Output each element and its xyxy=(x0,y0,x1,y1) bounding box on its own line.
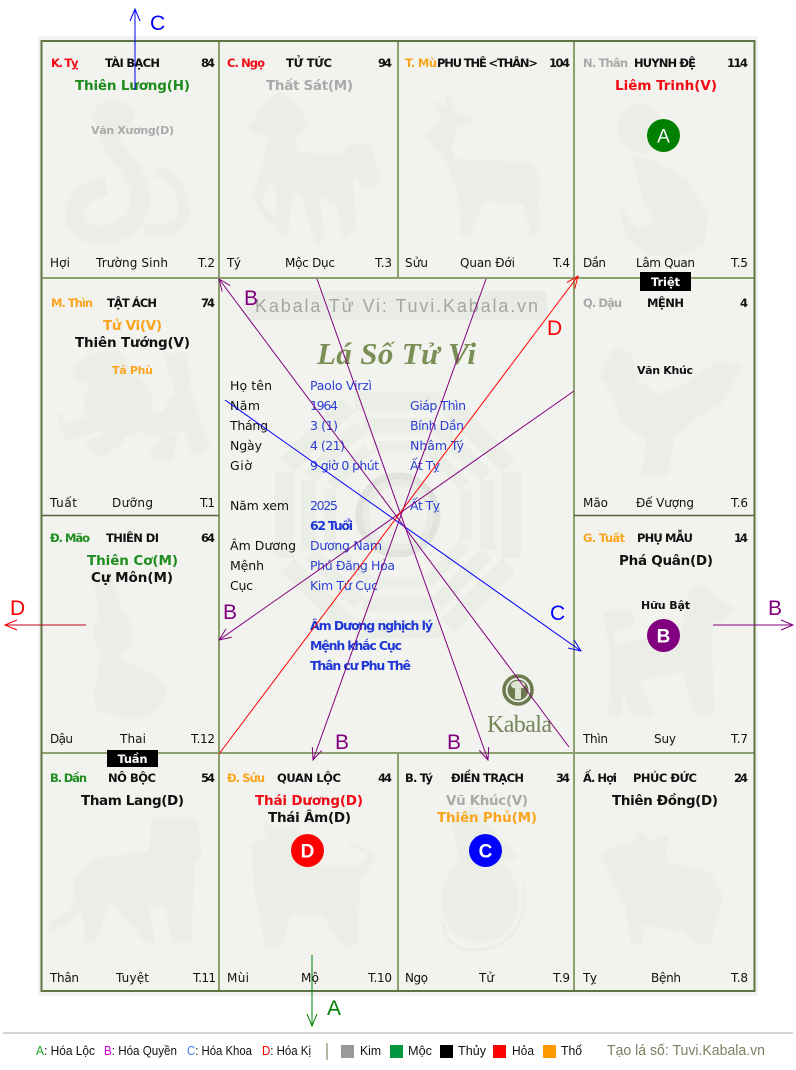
badge D: D xyxy=(301,842,314,862)
main star: Thiên Tướng(V) xyxy=(75,335,190,351)
footer row: Suy xyxy=(654,732,676,746)
footer row xyxy=(583,256,748,270)
icon: dragon watermark xyxy=(58,352,208,460)
icon: horse watermark xyxy=(250,93,380,243)
arrow: D left, red xyxy=(5,624,86,626)
header row: 44 xyxy=(378,771,392,785)
legend: Thủy: Thủy xyxy=(458,1043,486,1058)
banner: site name xyxy=(247,291,547,320)
header row: N. Thân xyxy=(583,56,628,70)
logo: Kabala: Kabala xyxy=(487,712,552,738)
badge A xyxy=(647,119,680,152)
header row: G. Tuất xyxy=(583,531,626,545)
panel: centre information xyxy=(229,291,552,738)
main star: Tử Vi(V) xyxy=(103,318,162,334)
footer row: T.10 xyxy=(367,971,392,985)
text block: birth details: Giờ xyxy=(230,458,252,473)
legend: Thổ xyxy=(543,1043,582,1058)
minor star: Văn Khúc xyxy=(637,364,693,377)
footer row: Tý xyxy=(226,256,241,270)
footer row xyxy=(50,732,215,746)
legend: D Hóa Kị: D: Hóa Kị xyxy=(262,1043,311,1058)
footer row: T.1 xyxy=(199,496,215,510)
footer row xyxy=(49,971,216,985)
panel: Phúc Đức (Hợi) xyxy=(575,754,754,991)
text block: birth details: 9 giờ 0 phút xyxy=(310,458,379,473)
footer row: Tỵ xyxy=(582,971,597,985)
text block: birth details: Họ tên xyxy=(230,378,272,393)
header row: 104 xyxy=(549,56,570,70)
minor star: Hữu Bật xyxy=(641,599,690,612)
header row xyxy=(51,295,215,310)
main star: Cự Môn(M) xyxy=(91,570,173,586)
title: Lá Số Tử Vi: Lá Số Tử Vi xyxy=(316,336,476,371)
header row: K. Tỵ xyxy=(51,56,79,70)
label: D left: D xyxy=(10,597,25,620)
footer row: Mộ xyxy=(301,971,319,985)
arrow: B left, purple xyxy=(219,391,574,640)
footer row: Lâm Quan xyxy=(636,256,695,270)
header row xyxy=(583,55,748,70)
icon: goat watermark xyxy=(428,95,537,233)
badge C xyxy=(469,834,502,867)
text block: birth details: Năm xem xyxy=(230,498,289,513)
icon: monkey watermark xyxy=(619,105,707,255)
footer row: T.12 xyxy=(190,732,215,746)
header row: Q. Dậu xyxy=(583,296,622,310)
text block: birth details: Mệnh xyxy=(230,558,264,573)
text block: birth details: 4 (21) xyxy=(310,438,345,453)
header row xyxy=(50,770,215,785)
main star: Thiên Cơ(M) xyxy=(87,553,178,569)
label: D upper-right: D xyxy=(547,317,562,340)
label: B bottom-left: B xyxy=(335,731,349,754)
panel: Điền Trạch (Tý) xyxy=(398,754,574,991)
arrow: D diagonal, red xyxy=(219,276,578,754)
header row xyxy=(405,768,570,785)
legend: Mộc xyxy=(390,1043,432,1058)
footer row: T.3 xyxy=(374,256,392,270)
footer row: Mùi xyxy=(227,971,249,985)
legend bar xyxy=(3,1033,793,1060)
minor star: Tả Phù xyxy=(112,364,153,377)
label: B bottom-right: B xyxy=(447,731,461,754)
icon: tiger watermark xyxy=(50,820,200,942)
header row: TỬ TỨC xyxy=(286,54,332,70)
badge D xyxy=(291,834,324,867)
header row xyxy=(227,770,392,785)
header row: PHÚC ĐỨC xyxy=(633,770,697,785)
header row: MỆNH xyxy=(647,295,684,310)
badge B: B xyxy=(657,626,670,648)
header row: Đ. Mão xyxy=(50,531,90,545)
text block: remarks: Mệnh khắc Cục xyxy=(310,638,402,653)
footer row: Tử xyxy=(478,971,495,985)
footer row: Sửu xyxy=(405,256,428,270)
panel: Thiên Di (Mão) xyxy=(42,516,219,753)
footer row xyxy=(583,496,748,510)
text block: birth details: 1964 xyxy=(310,398,338,413)
text block: remarks: Thân cư Phu Thê xyxy=(310,658,411,673)
footer row: T.4 xyxy=(552,256,570,270)
text block: birth details: Ất Tỵ xyxy=(410,497,441,513)
icon: rat watermark xyxy=(443,808,524,950)
arrow: A down, green xyxy=(311,955,313,1026)
footer row: T.6 xyxy=(730,496,748,510)
header row: QUAN LỘC xyxy=(277,770,341,785)
header row: M. Thìn xyxy=(51,296,93,310)
header row: TẬT ÁCH xyxy=(107,295,157,310)
footer row: Dần xyxy=(583,256,606,270)
main star: Thiên Phủ(M) xyxy=(437,810,537,826)
main star: Thiên Lương(H) xyxy=(75,78,190,94)
legend: Kim: Kim xyxy=(360,1043,381,1058)
header row: HUYNH ĐỆ xyxy=(634,55,696,70)
arrow: C diagonal, blue xyxy=(225,400,581,651)
logo: Kabala xyxy=(487,676,552,738)
text block: birth details: 3 (1) xyxy=(310,418,338,433)
panel: Phụ Mẫu (Tuất) xyxy=(575,516,754,753)
label: A bottom: A xyxy=(327,997,341,1020)
header row: B. Dần xyxy=(50,771,87,785)
footer row: T.5 xyxy=(730,256,748,270)
footer row: T.8 xyxy=(730,971,748,985)
footer row xyxy=(405,971,570,985)
main star: Thất Sát(M) xyxy=(266,77,353,94)
icon: dog watermark xyxy=(605,587,733,715)
label: C right: C xyxy=(550,602,565,625)
main star: Phá Quân(D) xyxy=(619,553,713,569)
header row xyxy=(50,530,215,545)
main star: Vũ Khúc(V) xyxy=(446,793,528,809)
footer row: Tuất xyxy=(49,496,77,510)
arrow: B upper-left, purple xyxy=(219,279,569,747)
panel: Tài Bạch (Tỵ) xyxy=(42,42,219,278)
icon: rabbit watermark xyxy=(95,573,165,717)
header row: ĐIỀN TRẠCH xyxy=(451,768,524,785)
panel: Phu Thê (Mùi) xyxy=(398,42,574,278)
badge C: C xyxy=(479,842,493,862)
header row: 94 xyxy=(378,56,392,70)
icon: rooster watermark xyxy=(600,350,740,473)
text block: birth details xyxy=(229,378,466,593)
panel: Tử Tức (Ngọ) xyxy=(220,42,397,278)
tag: Triệt: Triệt xyxy=(651,275,680,289)
header row: 14 xyxy=(734,531,748,545)
panel: Nô Bộc (Dần) xyxy=(42,754,219,991)
text block: birth details: 62 Tuổi xyxy=(310,518,353,533)
header row: PHỤ MẪU xyxy=(637,529,693,545)
main star: Liêm Trinh(V) xyxy=(615,78,717,94)
footer row: Trường Sinh xyxy=(95,256,168,270)
footer row: Ngọ xyxy=(405,971,428,985)
footer row: Hợi xyxy=(50,256,70,270)
legend: Thổ: Thổ xyxy=(561,1043,582,1058)
header row: 114 xyxy=(727,56,748,70)
tag: Triệt xyxy=(640,272,691,291)
header row: Ấ. Hợi xyxy=(583,768,617,785)
label: B right: B xyxy=(768,597,782,620)
legend: Hỏa: Hỏa xyxy=(512,1043,535,1058)
footer row: Thân xyxy=(49,971,79,985)
text block: birth details: Kim Tứ Cục xyxy=(310,578,378,593)
arrow: B down-left, purple xyxy=(313,279,486,760)
header row xyxy=(405,55,570,70)
footer row: T.7 xyxy=(730,732,748,746)
footer row: Mộc Dục xyxy=(285,256,335,270)
main star: Thiên Đồng(D) xyxy=(612,792,718,809)
header row xyxy=(583,768,748,785)
text block: birth details: Bính Dần xyxy=(410,418,464,433)
main star: Thái Âm(D) xyxy=(268,809,351,826)
footer row: T.11 xyxy=(192,971,216,985)
label: C top: C xyxy=(150,12,165,35)
credit link text: Tạo lá số: Tuvi.Kabala.vn xyxy=(607,1043,765,1059)
header row: B. Tý xyxy=(405,771,434,785)
footer row: T.9 xyxy=(552,971,570,985)
footer row xyxy=(582,971,748,985)
text block: birth details: Ngày xyxy=(230,438,263,453)
legend: Mộc: Mộc xyxy=(408,1043,432,1058)
footer row xyxy=(582,732,748,746)
tag: Tuần xyxy=(107,750,158,767)
footer row: Tuyệt xyxy=(115,971,149,985)
label: B upper-left: B xyxy=(244,287,258,310)
main star: Tham Lang(D) xyxy=(81,793,184,809)
badge B xyxy=(647,619,680,652)
icon: snake watermark xyxy=(75,100,184,235)
label: B left: B xyxy=(223,601,237,624)
text block: birth details: Dương Nam xyxy=(310,538,382,553)
header row: 74 xyxy=(201,296,215,310)
footer row: Thìn xyxy=(582,732,608,746)
icon: pig watermark xyxy=(602,830,722,943)
text block: birth details: Tháng xyxy=(229,418,268,433)
panel: Mệnh (Dậu) xyxy=(575,279,754,515)
footer row xyxy=(227,971,392,985)
text block: birth details: 2025 xyxy=(310,498,338,513)
header row: 54 xyxy=(201,771,215,785)
grid lines xyxy=(41,41,754,991)
header row: Đ. Sửu xyxy=(227,771,265,785)
header row xyxy=(583,529,748,545)
header row: T. Mù xyxy=(405,56,437,70)
header row xyxy=(583,295,748,310)
legend: A Hóa Lộc: A: Hóa Lộc xyxy=(36,1043,95,1058)
footer row: Quan Đới xyxy=(460,256,515,270)
footer row xyxy=(405,256,570,270)
arrow: C top, blue xyxy=(134,9,136,90)
header row: C. Ngọ xyxy=(227,56,265,70)
header row: NÔ BỘC xyxy=(108,770,156,785)
watermark: bagua centre xyxy=(275,392,521,638)
header row: THIÊN DI xyxy=(106,530,159,545)
header row: 24 xyxy=(734,771,748,785)
legend: Hỏa xyxy=(493,1043,535,1058)
panel: Tật Ách (Thìn) xyxy=(42,279,219,515)
text block: birth details: Ất Tỵ xyxy=(410,457,441,473)
header row: 64 xyxy=(201,531,215,545)
header row xyxy=(51,55,215,70)
footer row: Đế Vượng xyxy=(636,496,694,510)
tag: Tuần: Tuần xyxy=(118,752,148,766)
text block: birth details: Cục xyxy=(230,578,253,593)
legend: Kim xyxy=(341,1043,381,1058)
text block: birth details: Phú Đăng Hỏa xyxy=(310,558,395,573)
header row: PHU THÊ <THÂN> xyxy=(437,55,538,70)
banner: site name: Kabala Tử Vi: Tuvi.Kabala.vn xyxy=(255,296,538,316)
text block: birth details: Giáp Thìn xyxy=(410,398,466,413)
legend: C Hóa Khoa: C: Hóa Khoa xyxy=(187,1043,253,1058)
icon: ox watermark xyxy=(253,822,373,945)
text block: remarks: Âm Dương nghịch lý xyxy=(310,618,433,633)
main star: Thái Dương(D) xyxy=(255,793,363,809)
panel: Quan Lộc (Sửu) xyxy=(220,754,397,991)
panel: Huynh Đệ (Thân) xyxy=(575,42,754,278)
header row: 4 xyxy=(740,296,748,310)
arrow: B right, purple xyxy=(713,624,793,626)
header row xyxy=(227,54,392,70)
footer row: T.2 xyxy=(197,256,215,270)
footer row: Thai xyxy=(119,732,146,746)
footer row: Dậu xyxy=(50,732,73,746)
header row: 34 xyxy=(556,771,570,785)
text block: birth details: Năm xyxy=(230,398,260,413)
text block: remarks xyxy=(310,618,433,673)
footer row: Mão xyxy=(583,496,608,510)
header row: 84 xyxy=(201,56,215,70)
text block: birth details: Âm Dương xyxy=(230,538,296,553)
footer row: Bệnh xyxy=(651,971,681,985)
legend: B Hóa Quyền: B: Hóa Quyền xyxy=(104,1043,177,1058)
text block: birth details: Nhâm Tý xyxy=(410,438,465,453)
text block: birth details: Paolo Virzì xyxy=(310,378,372,393)
header row: TÀI BẠCH xyxy=(105,55,160,70)
footer row xyxy=(49,496,215,510)
footer row xyxy=(50,256,215,270)
footer row xyxy=(226,256,392,270)
legend: Thủy xyxy=(440,1043,486,1058)
minor star: Văn Xương(D) xyxy=(91,124,174,137)
arrow: B down-right, purple xyxy=(317,279,488,760)
badge A: A xyxy=(657,126,670,148)
footer row: Dưỡng xyxy=(112,496,153,510)
